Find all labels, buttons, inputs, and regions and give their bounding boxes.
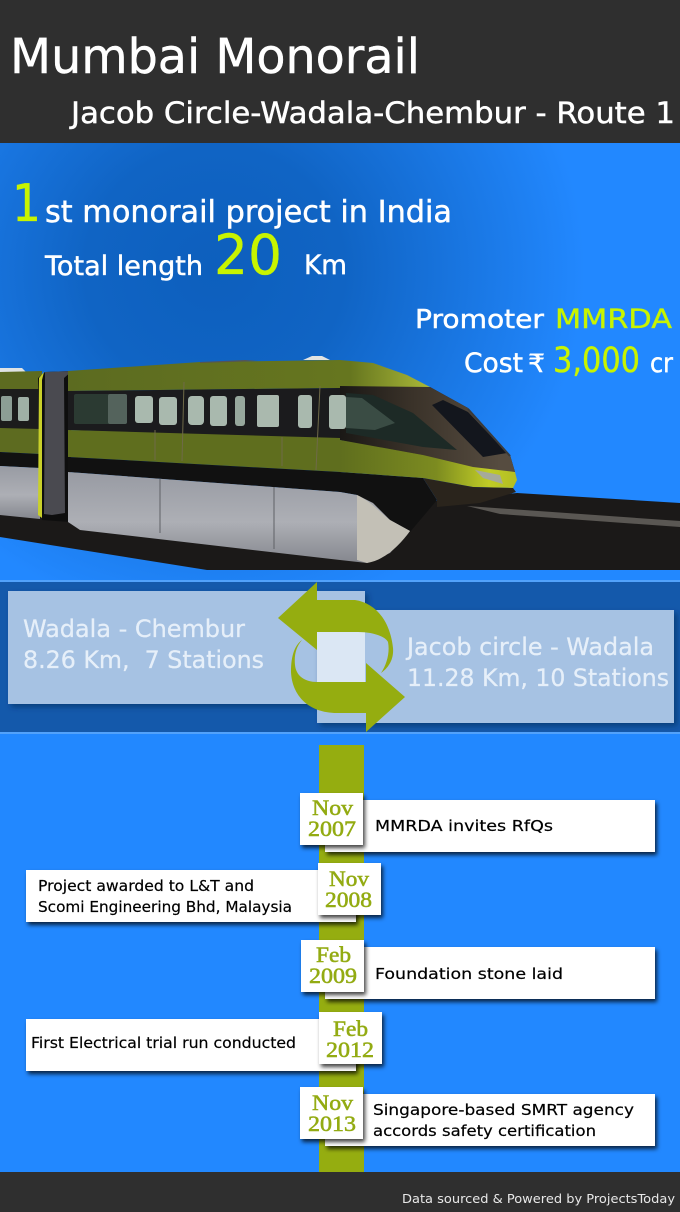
cab side window — [346, 393, 457, 450]
milestone: Feb 2009: Foundation stone laid — [375, 965, 563, 983]
yellow nose band — [340, 440, 517, 488]
roof — [68, 360, 430, 391]
rear car — [0, 368, 42, 519]
windows — [74, 394, 346, 429]
black stripe — [68, 457, 437, 532]
stat: cost: cr — [650, 348, 674, 379]
stat: cost: Cost — [464, 348, 523, 379]
arrow: bottom, pointing right — [291, 640, 405, 732]
milestone: Nov 2007: MMRDA invites RfQs — [375, 817, 553, 835]
section box: Wadala - Chembur: 8.26 Km, 7 Stations — [23, 646, 264, 674]
main car body — [68, 356, 517, 563]
milestone: Nov 2008: 2008 — [325, 887, 372, 912]
stat: total length: 20 — [214, 223, 282, 287]
milestone: Nov 2008: Scomi Engineering Bhd, Malaysia — [38, 898, 292, 916]
milestone: Nov 2007: Nov — [312, 795, 353, 820]
panel: route sections — [0, 580, 680, 734]
lower nose — [423, 478, 516, 507]
milestone: Nov 2008 — [26, 863, 381, 922]
panel: project overview — [0, 143, 680, 580]
arrow: top, pointing left — [278, 582, 393, 673]
milestone: Feb 2012: Feb — [333, 1016, 368, 1041]
car connector — [38, 371, 72, 522]
milestone: Nov 2013: Singapore-based SMRT agency — [373, 1101, 634, 1119]
milestone: Nov 2013 — [300, 1087, 655, 1146]
stat: cost: 3,000 — [553, 341, 640, 381]
timeline bar — [319, 745, 364, 1172]
milestone: Feb 2012 — [26, 1012, 382, 1071]
illustration: monorail train on guideway — [0, 356, 680, 570]
milestone: Nov 2013: Nov — [312, 1090, 353, 1115]
milestone: Feb 2009 — [301, 940, 655, 999]
guideway — [0, 493, 680, 570]
source credit: Data sourced & Powered by ProjectsToday — [402, 1191, 676, 1206]
stat: first monorail: 1 — [12, 174, 41, 234]
section box: Jacob circle - Wadala — [317, 610, 674, 723]
stat: total length: Km — [304, 250, 347, 281]
stat: first monorail — [12, 174, 452, 234]
header band — [0, 0, 680, 143]
milestone: Nov 2013: 2013 — [308, 1111, 356, 1136]
milestone: Feb 2012: 2012 — [326, 1037, 374, 1062]
stat: promoter: Promoter — [415, 305, 544, 335]
windshield — [432, 400, 507, 457]
stat: cost: ₹ — [528, 349, 545, 378]
silver skirt — [68, 472, 410, 563]
milestone: Nov 2007: 2007 — [308, 816, 356, 841]
milestone: Nov 2013: accords safety certification — [373, 1122, 596, 1140]
section box: Wadala - Chembur: Wadala - Chembur — [23, 615, 245, 643]
section box: Wadala - Chembur — [8, 591, 365, 704]
stat: total length — [44, 223, 347, 287]
section box: Jacob circle - Wadala: Jacob circle - Wadala — [405, 633, 654, 661]
headlight — [475, 470, 503, 484]
milestone: Nov 2007 — [300, 793, 655, 852]
milestone: Feb 2009: Feb — [316, 942, 351, 967]
stat: first monorail: st monorail project in India — [45, 195, 452, 230]
milestone: Feb 2012: First Electrical trial run conducted — [31, 1034, 296, 1052]
section box: Jacob circle - Wadala: 11.28 Km, 10 Stations — [407, 664, 669, 692]
milestone: Feb 2009: 2009 — [309, 963, 357, 988]
stat: cost — [464, 341, 674, 381]
stat: total length: Total length — [44, 251, 203, 282]
subtitle: Jacob Circle-Wadala-Chembur - Route 1 — [69, 96, 675, 130]
lower green band — [68, 430, 340, 472]
milestone: Nov 2008: Nov — [329, 866, 369, 891]
title: Mumbai Monorail — [10, 29, 420, 85]
stat: promoter — [415, 304, 673, 335]
milestone: Nov 2008: Project awarded to L&T and — [38, 877, 254, 895]
panel: project timeline — [26, 745, 655, 1172]
footer band — [0, 1172, 680, 1212]
stat: promoter: MMRDA — [555, 304, 673, 335]
